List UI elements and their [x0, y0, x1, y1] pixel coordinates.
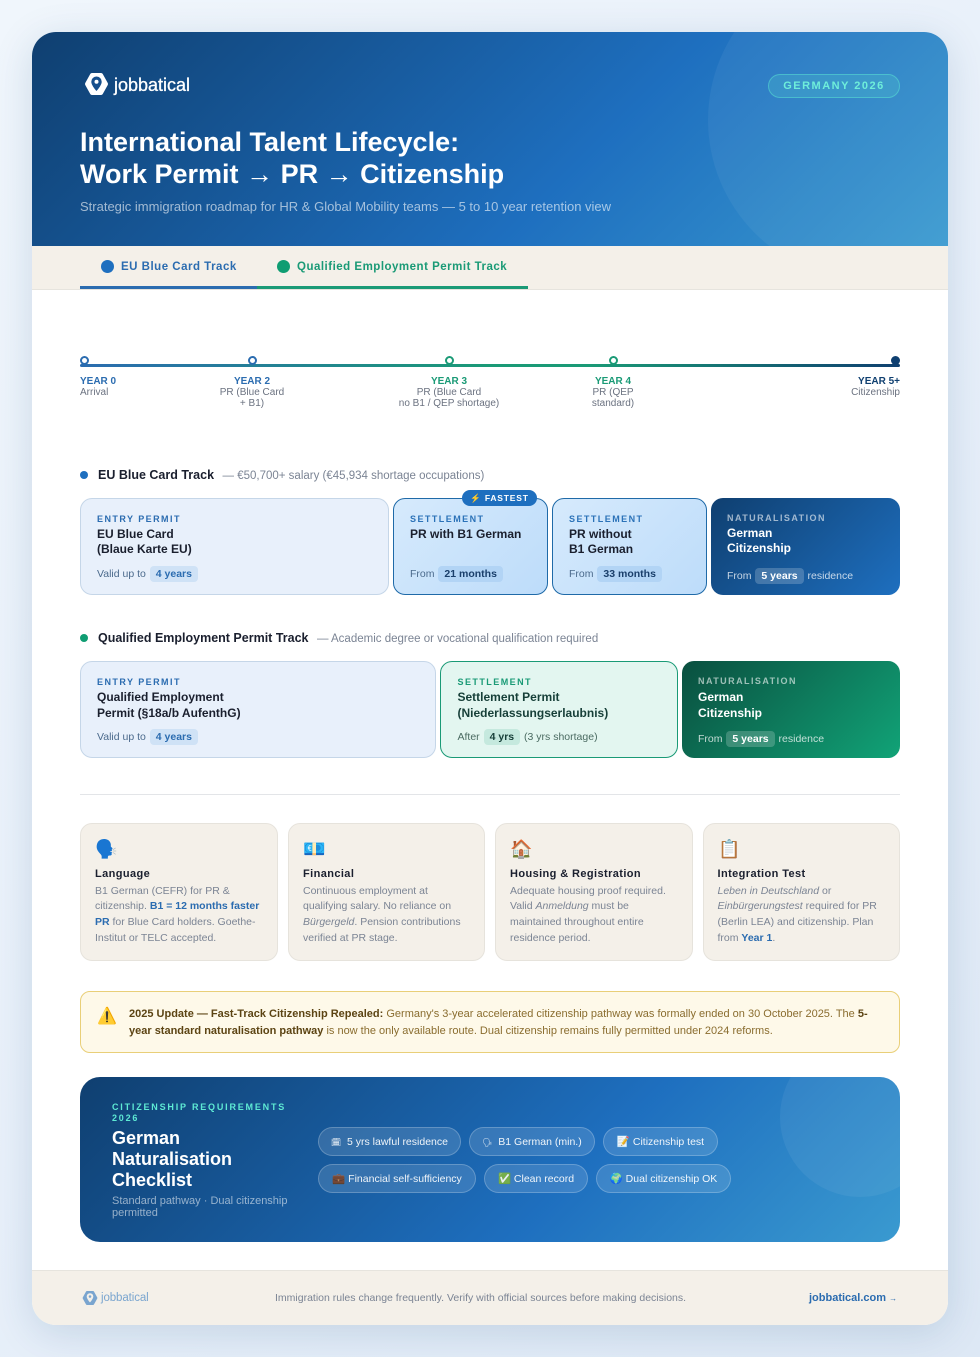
info card: Integration Test: Leben in Deutschland or — [718, 884, 831, 896]
chip: financial — [318, 1164, 476, 1193]
card: EU Blue Card entry permit: EU Blue Card — [97, 527, 174, 541]
label: year 0: YEAR 0 — [80, 376, 116, 387]
timeline bar — [80, 364, 900, 367]
header banner — [32, 32, 948, 246]
logo: jobbatical — [85, 73, 190, 96]
decorative circle — [708, 0, 980, 280]
info card: Financial: verified at PR stage. — [303, 932, 398, 944]
label: year 0: Arrival — [80, 387, 108, 398]
footer logo: jobbatical — [101, 1292, 149, 1304]
icon: speaking head: 🗣️ — [95, 839, 117, 859]
info card: Language: B1 German (CEFR) for PR & — [95, 884, 230, 896]
card: Qualified Employment entry permit: Valid up to — [97, 731, 146, 743]
info card: Housing and Registration — [495, 823, 693, 961]
label: year 0 — [80, 376, 116, 398]
tab: Qualified Employment Permit Track: Qualified Employment Permit Track — [297, 261, 507, 273]
card: German citizenship green track: From residence — [698, 733, 824, 745]
card: Settlement Permit: Settlement Permit — [458, 690, 560, 704]
label: year 5+ — [851, 376, 900, 398]
info card: Housing and Registration: Valid Anmeldung must be — [510, 900, 629, 912]
icon: clipboard: 📋 — [718, 839, 740, 859]
card: German citizenship blue track: Citizenship — [727, 541, 791, 555]
badge: Germany 2026 — [768, 74, 900, 98]
checklist subtitle — [112, 1195, 287, 1219]
icon: euro banknote: 💶 — [303, 839, 325, 859]
card: EU Blue Card entry permit: 4 years — [156, 568, 192, 580]
badge: fastest — [462, 490, 537, 506]
info card: Financial: Continuous employment at — [303, 884, 428, 896]
divider — [80, 794, 900, 795]
card: PR without B1 German: PR without — [569, 527, 632, 541]
card: PR with B1 German — [393, 498, 548, 595]
label: year 5+: YEAR 5+ — [858, 376, 900, 387]
card: German citizenship green track: Citizenship — [698, 706, 762, 720]
subtitle: Strategic immigration roadmap for HR & Global Mobility teams — 5 to 10 year retention view — [80, 199, 611, 214]
card: German citizenship green track — [682, 661, 900, 758]
icon: house: 🏠 — [510, 839, 532, 859]
card: PR with B1 German: 21 months — [444, 568, 497, 580]
footer logo — [82, 1291, 149, 1305]
year 5 marker — [891, 356, 900, 365]
icon: warning: ⚠️ — [97, 1008, 117, 1025]
eyebrow — [112, 1102, 286, 1123]
info card: Integration Test: from Year 1. — [718, 932, 775, 944]
label: year 3: YEAR 3 — [431, 376, 467, 387]
chip: residence: 🗓 5 yrs lawful residence — [331, 1136, 448, 1148]
card: German citizenship blue track: From residence — [727, 570, 853, 582]
info card: Integration Test: Integration Test — [718, 868, 806, 880]
info card: Housing and Registration: Adequate housing proof required. — [510, 884, 666, 896]
chip: dual citizenship: 🌍 Dual citizenship OK — [610, 1173, 717, 1185]
checklist title: Checklist — [112, 1170, 192, 1190]
chip: B1 German: 🗣 B1 German (min.) — [482, 1136, 582, 1148]
card: Settlement Permit: After (3 yrs shortage) — [458, 731, 598, 743]
alert text — [129, 1008, 868, 1037]
title: International Talent Lifecycle: — [80, 127, 459, 157]
card: German citizenship blue track: German — [727, 526, 772, 540]
label: year 3 — [399, 376, 499, 409]
card: PR with B1 German: SETTLEMENT — [410, 514, 484, 524]
card: PR without B1 German: From — [569, 568, 594, 580]
chip: residence — [318, 1127, 461, 1156]
label: year 2: PR (Blue Card — [220, 387, 284, 398]
year 0 marker — [80, 356, 89, 365]
label: year 3: PR (Blue Card — [417, 387, 481, 398]
info card: Housing and Registration: maintained throughout entire — [510, 916, 644, 928]
chip: dual citizenship — [596, 1164, 731, 1193]
info card: Financial: Financial — [303, 868, 354, 880]
chip: citizenship test — [603, 1127, 718, 1156]
tab: EU Blue Card Track — [80, 246, 257, 289]
timeline — [80, 356, 900, 409]
info card: Financial: Bürgergeld. Pension contributions — [303, 916, 461, 928]
card: EU Blue Card entry permit — [80, 498, 389, 595]
card: EU Blue Card entry permit: Valid up to — [97, 568, 146, 580]
card: Settlement Permit: (Niederlassungserlaubnis) — [458, 706, 608, 720]
alert text: year standard naturalisation pathway is now the only available route. Dual citizenship remains fully permitted under 2024 reforms. — [129, 1025, 773, 1037]
info card: Housing and Registration: residence period. — [510, 932, 591, 944]
chip: clean record: ✅ Clean record — [498, 1173, 574, 1185]
panel: citizenship requirements — [80, 1077, 900, 1242]
info card: Integration Test: (Berlin LEA) and citizenship. Plan — [718, 916, 873, 928]
label: year 2: YEAR 2 — [234, 376, 270, 387]
checklist subtitle: Standard pathway · Dual citizenship — [112, 1195, 287, 1207]
tab: Qualified Employment Permit Track — [257, 246, 528, 289]
checklist title: Naturalisation — [112, 1149, 232, 1169]
label: year 3: no B1 / QEP shortage) — [399, 398, 499, 409]
label: year 4: YEAR 4 — [595, 376, 631, 387]
heading: Qualified Employment Permit Track: Qualified Employment Permit Track — Academic degree or vocational qualification required — [98, 631, 598, 645]
title: Work Permit → PR → Citizenship — [80, 159, 504, 189]
label: year 4: PR (QEP — [592, 387, 634, 398]
eyebrow: CITIZENSHIP REQUIREMENTS — [112, 1102, 286, 1112]
card: Settlement Permit: SETTLEMENT — [458, 677, 532, 687]
card: Settlement Permit: 4 yrs — [490, 731, 514, 743]
alert: 2025 update — [80, 991, 900, 1053]
label: year 2: + B1) — [240, 398, 264, 409]
chip: clean record — [484, 1164, 588, 1193]
logo: jobbatical: jobbatical — [114, 75, 190, 95]
card: EU Blue Card entry permit: ENTRY PERMIT — [97, 514, 181, 524]
card: German citizenship blue track: 5 years — [761, 570, 798, 582]
badge: Germany 2026: GERMANY 2026 — [783, 80, 885, 92]
card: Qualified Employment entry permit — [80, 661, 436, 758]
track tabs — [32, 246, 948, 290]
info card: Language: Language — [95, 868, 150, 880]
decorative circle — [780, 1037, 940, 1197]
label: year 2 — [220, 376, 284, 409]
label: year 5+: Citizenship — [851, 387, 900, 398]
card: PR without B1 German: SETTLEMENT — [569, 514, 644, 524]
card: EU Blue Card entry permit: (Blaue Karte EU) — [97, 542, 192, 556]
card: Qualified Employment entry permit: ENTRY PERMIT — [97, 677, 181, 687]
footer link: jobbatical.com → — [809, 1292, 897, 1304]
chip: citizenship test: 📝 Citizenship test — [617, 1136, 704, 1148]
card: PR without B1 German: B1 German — [569, 542, 633, 556]
card: Qualified Employment entry permit: 4 years — [156, 731, 192, 743]
checklist title — [112, 1128, 232, 1190]
info card: Financial — [288, 823, 485, 961]
card: German citizenship blue track — [711, 498, 900, 595]
info card: Integration Test — [703, 823, 900, 961]
chip: B1 German — [469, 1127, 595, 1156]
info card: Financial: qualifying salary. No reliance on — [303, 900, 451, 912]
info card: Language: Institut or TELC accepted. — [95, 932, 216, 944]
tab: EU Blue Card Track: EU Blue Card Track — [121, 261, 237, 273]
card: Qualified Employment entry permit: Permit (§18a/b AufenthG) — [97, 706, 241, 720]
year 4 marker — [609, 356, 618, 365]
card: PR with B1 German: From — [410, 568, 434, 580]
alert text: 2025 Update — Fast-Track Citizenship Repealed: Germany's 3-year accelerated citizenship pathway was formally ended on 30 October 2025. The 5- — [129, 1008, 868, 1020]
info card: Language: citizenship. B1 = 12 months faster — [95, 900, 259, 912]
card: German citizenship green track: 5 years — [732, 733, 769, 745]
heading: EU Blue Card Track: EU Blue Card Track — €50,700+ salary (€45,934 shortage occupations) — [98, 468, 484, 482]
card: German citizenship green track: NATURALISATION — [698, 676, 797, 686]
card: German citizenship blue track: NATURALISATION — [727, 513, 826, 523]
badge: fastest: ⚡ FASTEST — [470, 493, 529, 503]
info card: Housing and Registration: Housing & Registration — [510, 868, 641, 880]
card: PR without B1 German: 33 months — [603, 568, 656, 580]
card: PR with B1 German: PR with B1 German — [410, 527, 521, 541]
title — [80, 127, 504, 189]
info card: Language: PR for Blue Card holders. Goethe- — [95, 916, 256, 928]
checklist title: German — [112, 1128, 180, 1148]
year 3 marker — [445, 356, 454, 365]
card: PR without B1 German — [552, 498, 707, 595]
chip: financial: 💼 Financial self-sufficiency — [332, 1173, 462, 1185]
eyebrow: 2026 — [112, 1113, 139, 1123]
footer — [32, 1270, 948, 1325]
checklist subtitle: permitted — [112, 1207, 158, 1219]
disclaimer: Immigration rules change frequently. Verify with official sources before making decisions. — [275, 1292, 686, 1304]
year 2 marker — [248, 356, 257, 365]
card: German citizenship green track: German — [698, 690, 743, 704]
info card: Language — [80, 823, 278, 961]
label: year 4: standard) — [592, 398, 634, 409]
card: Qualified Employment entry permit: Qualified Employment — [97, 690, 224, 704]
label: year 4 — [592, 376, 634, 409]
info card: Integration Test: Einbürgerungstest required for PR — [718, 900, 877, 912]
card: Settlement Permit — [440, 661, 678, 758]
